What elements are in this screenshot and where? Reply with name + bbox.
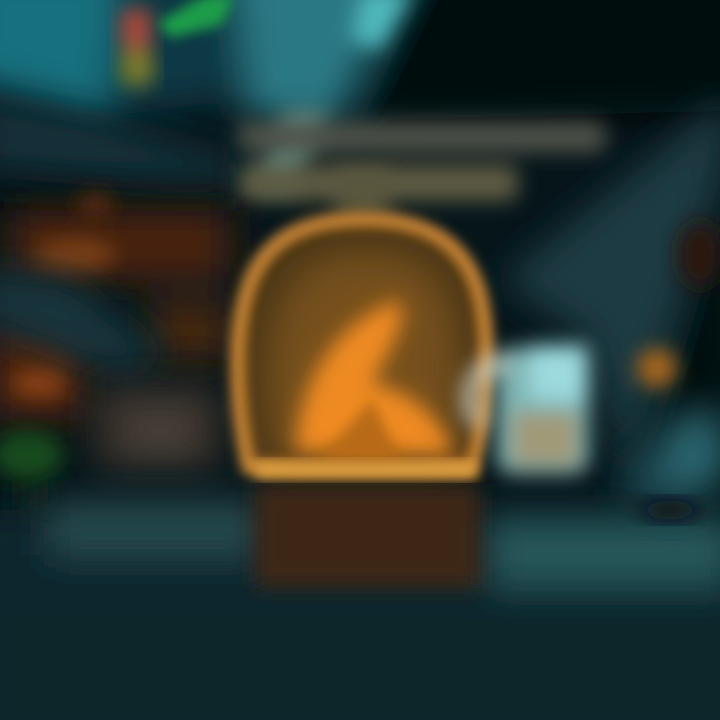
grey machine left [95, 385, 220, 470]
light beam [250, 0, 412, 190]
left orange highlights [12, 193, 115, 397]
dark foot of right object [640, 500, 700, 520]
right cone shape [500, 95, 720, 520]
background: top area [0, 0, 720, 125]
flame inner wedge [320, 400, 400, 458]
dome neck [335, 170, 390, 215]
orange dot right [637, 221, 720, 388]
right teal object [615, 405, 720, 510]
dome lamp [237, 170, 487, 478]
flame [295, 300, 455, 455]
blurred heading text [238, 122, 606, 201]
floor [0, 500, 720, 720]
glass mug [470, 345, 589, 474]
left orange glow shelves [0, 210, 230, 420]
box base [255, 484, 480, 588]
dark slab upper left [0, 100, 240, 200]
dome body [237, 218, 487, 468]
dark teal ledge left [0, 270, 165, 375]
green arrow [158, 0, 235, 38]
dome base glow [255, 462, 477, 478]
traffic light chart icon [120, 8, 154, 86]
green plant icon [0, 431, 64, 520]
dome inner glow [266, 250, 458, 460]
